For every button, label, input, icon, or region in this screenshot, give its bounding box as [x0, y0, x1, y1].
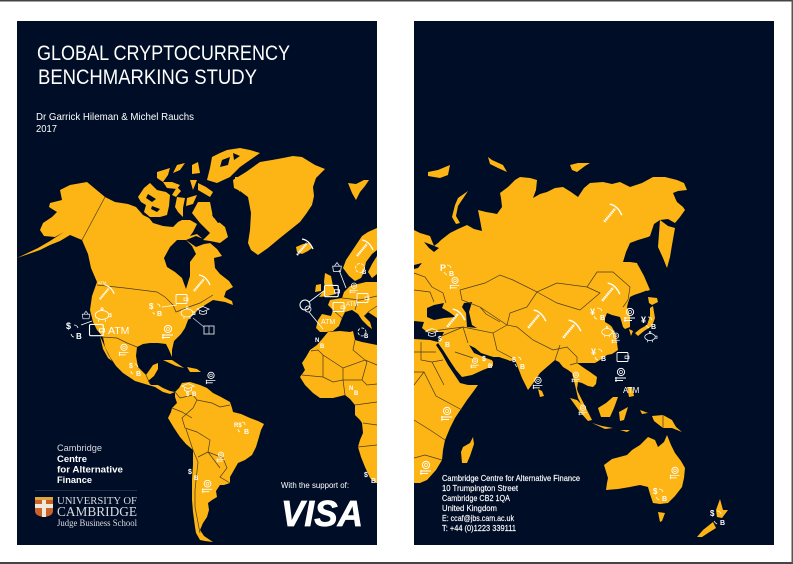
title: GLOBAL CRYPTOCURRENCY	[37, 42, 290, 65]
icon: exchange dollar to bitcoin Chicago	[149, 302, 177, 318]
icon: piggy bank China	[602, 326, 614, 337]
Kamchatka	[658, 220, 675, 268]
icon: hand coin Korea	[624, 308, 635, 322]
label: ATM California: ATM	[108, 325, 129, 337]
icon: exchange Australia: B	[662, 496, 667, 503]
Country borders	[414, 272, 663, 460]
University of Cambridge Judge Business School logo: Judge Business School	[57, 518, 137, 528]
icon: exchange Russia: P	[440, 263, 446, 273]
icon: exchange Hong Kong: B	[601, 356, 606, 363]
icon: exchange Japan: B	[651, 324, 656, 331]
contact address: 10 Trumpington Street	[442, 483, 519, 493]
icon: exchange Hong Kong: ¥	[591, 347, 596, 357]
label: ATM Alps: ATM	[346, 302, 358, 308]
Cambridge Centre for Alternative Finance logo: for Alternative	[57, 464, 123, 474]
authors and year: Dr Garrick Hileman & Michel Rauchs	[36, 112, 194, 123]
Greenland	[233, 156, 325, 255]
icon: hand coin Caribbean	[206, 372, 215, 384]
contact address: United Kingdom	[442, 503, 497, 513]
icon: exchange dollar to bitcoin west: $	[66, 321, 71, 331]
Svalbard	[348, 180, 369, 200]
Scandinavia	[343, 228, 377, 281]
Country borders	[82, 197, 377, 533]
icon: exchange Brazil: R$	[234, 423, 242, 429]
icon: exchange New Zealand: B	[720, 520, 725, 527]
icon: exchange Brazil	[234, 422, 249, 436]
icon: exchange South Africa: B	[371, 478, 376, 485]
icon: hand coin Vietnam	[572, 372, 580, 382]
Cambridge Centre for Alternative Finance logo: Finance	[57, 475, 92, 485]
icon: pickaxe Siberia	[604, 204, 622, 222]
icon: exchange New Zealand: $	[710, 509, 715, 518]
South America	[168, 382, 264, 542]
panel: front cover	[17, 21, 377, 545]
label: ATM Spain: ATM	[321, 319, 335, 326]
authors and year	[36, 112, 194, 135]
icon: exchange China north: ¥	[590, 307, 595, 317]
icon: exchange dollar to bitcoin west	[66, 321, 92, 341]
icon: hand coin Russia	[450, 277, 459, 289]
icon: hand coin Shanghai	[612, 333, 620, 343]
Cuba and Hispaniola	[163, 360, 201, 372]
icon: hand coin UAE	[470, 358, 479, 368]
icon: network globe Atlantic	[300, 270, 346, 329]
icon: hand coin Argentina	[202, 480, 212, 493]
Sri Lanka	[538, 389, 544, 397]
icon: exchange UAE: $	[482, 356, 486, 363]
icon: hand coin Southern US	[162, 325, 173, 339]
icon: wallet Germany	[357, 294, 369, 302]
icon: exchange Mexico	[129, 363, 141, 378]
support text: With the support of:	[281, 481, 349, 490]
icon: exchange dollar to bitcoin west: B	[76, 332, 82, 341]
icon: basket California	[82, 311, 90, 319]
Arctic islands	[138, 148, 260, 243]
icon: exchange Pakistan: $	[512, 357, 516, 364]
contact address: Cambridge CB2 1QA	[442, 493, 510, 503]
Madagascar	[461, 437, 474, 463]
icon: book Atlantic	[193, 318, 214, 334]
icon: exchange Pakistan: B	[520, 364, 525, 371]
icon: piggy bank California	[95, 308, 111, 322]
icon: hand coin Philippines	[615, 368, 626, 382]
New Guinea	[652, 415, 682, 432]
icon: pickaxe Inner Mongolia	[602, 283, 620, 301]
icon: exchange Venezuela: $	[186, 392, 190, 398]
icon: exchange UAE: B	[488, 364, 493, 370]
icon: exchange Australia	[653, 487, 667, 503]
icon: exchange Israel	[438, 336, 450, 349]
Mediterranean Sea	[414, 321, 444, 342]
icon: exchange Nigeria: N	[349, 386, 353, 392]
Hudson Bay	[164, 240, 196, 289]
icon: hand coin Australia	[670, 467, 679, 479]
label: ATM Philippines: ATM	[623, 386, 640, 395]
Arctic channels	[146, 153, 240, 223]
icon: exchange Brazil: B	[244, 429, 249, 436]
icon: graduation cap Venezuela	[182, 384, 194, 391]
icon: exchange Hong Kong	[591, 347, 606, 363]
icon: basket Atlantic	[333, 263, 341, 271]
icon: exchange Chile: B	[194, 476, 199, 482]
map icons: North America	[66, 239, 313, 493]
icon: hand coin Netherlands	[350, 283, 358, 293]
world map: Americas and western Europe/Africa	[17, 148, 377, 542]
icon: exchange Japan: ¥	[641, 315, 646, 325]
icon: university crest	[35, 497, 53, 517]
Baja California	[100, 336, 112, 361]
University of Cambridge Judge Business School logo: CAMBRIDGE	[57, 504, 137, 519]
icon: graduation cap Boston	[197, 306, 209, 314]
icon: pickaxe Sweden	[357, 240, 373, 256]
icon: exchange Morocco: B	[320, 344, 325, 350]
icon: graduation cap Eastern Mediterranean	[426, 328, 438, 336]
Baltic Sea	[414, 263, 422, 269]
icon: wallet UK	[324, 285, 340, 297]
icon: wallet Taiwan	[617, 352, 629, 362]
icon: hand coin Kenya	[441, 407, 452, 421]
icon: exchange dollar to bitcoin Chicago: B	[157, 311, 162, 318]
contact address: E: ccaf@jbs.cam.ac.uk	[442, 513, 515, 523]
icon: exchange Mexico: $	[129, 363, 133, 370]
Iceland	[296, 243, 312, 254]
icon: exchange Venezuela	[186, 392, 197, 398]
University of Cambridge Judge Business School logo: UNIVERSITY OF	[57, 496, 137, 507]
icon: exchange Russia: B	[449, 271, 454, 278]
icon: hand coin South Africa	[420, 461, 431, 475]
British Isles	[315, 273, 336, 297]
Australia	[604, 435, 685, 504]
icon: exchange Mexico: B	[136, 371, 141, 378]
North America	[17, 182, 233, 394]
Arctic islands of Russia	[428, 157, 590, 224]
authors and year: 2017	[36, 124, 57, 135]
University of Cambridge Judge Business School logo	[35, 496, 137, 528]
icon: piggy bank New York	[181, 306, 195, 319]
Black Sea	[427, 303, 456, 320]
icon: pickaxe Sichuan	[563, 320, 581, 338]
icon: pickaxe Iceland	[297, 239, 313, 255]
icon: pickaxe western US	[100, 285, 114, 299]
icon: exchange Sweden: B	[362, 270, 367, 276]
icon: exchange South Africa: $	[364, 472, 368, 479]
Hudson Strait	[186, 236, 211, 247]
world map: Eurasia, Africa and Oceania	[414, 157, 728, 537]
Cambridge Centre for Alternative Finance logo	[35, 443, 137, 491]
icon: hand coin Sumatra	[578, 405, 587, 415]
Tasmania	[658, 512, 665, 522]
icon: hand coin India	[533, 377, 542, 389]
icon: hand coin Mexico	[119, 344, 128, 356]
icon: exchange Chile: $	[188, 469, 192, 476]
Japan	[629, 265, 658, 336]
VISA logo: VISA	[281, 493, 363, 534]
icon: exchange New Zealand	[710, 509, 725, 527]
Cambridge Centre for Alternative Finance logo: Centre	[57, 454, 87, 464]
icon: wallet California	[90, 324, 104, 336]
icon: exchange UAE	[482, 356, 493, 370]
icon: exchange dollar to bitcoin Chicago: $	[149, 302, 154, 311]
Africa (west)	[300, 331, 377, 483]
contact address: T: +44 (0)1223 339111	[442, 523, 516, 533]
label: ATM Vancouver: ATM	[98, 280, 106, 285]
panel: back cover	[414, 21, 774, 545]
icon: exchange China north	[590, 307, 605, 322]
Persian Gulf	[469, 345, 497, 362]
Continental Europe	[316, 282, 377, 332]
map icons: Europe and Africa	[300, 240, 376, 485]
icon: exchange Venezuela: B	[192, 392, 197, 398]
icon: exchange Nigeria: B	[354, 391, 359, 397]
contact address	[442, 473, 580, 533]
icon: wallet Great Lakes	[176, 294, 188, 304]
Caspian Sea	[462, 302, 477, 328]
White Sea	[424, 242, 439, 252]
icon: exchange Sweden	[356, 264, 367, 276]
icon: pickaxe Georgia	[447, 309, 465, 327]
New Zealand	[697, 499, 728, 537]
icon: exchange Italy: B	[364, 334, 369, 340]
icon: hand coin Paraguay	[216, 452, 225, 462]
icon: exchange Italy	[358, 328, 369, 340]
icon: pickaxe Canada	[194, 275, 210, 291]
icon: exchange Morocco: N	[315, 338, 319, 344]
icon: piggy bank Japan	[645, 331, 657, 342]
icon: exchange Nigeria	[349, 386, 359, 397]
title	[37, 42, 290, 89]
Indonesia and Philippines	[570, 387, 648, 432]
icon: exchange Morocco	[315, 338, 325, 350]
icon: pickaxe Western China	[528, 310, 546, 328]
icon: exchange China north: B	[600, 315, 605, 322]
icon: exchange Israel: B	[445, 342, 450, 349]
icon: exchange Israel: $	[438, 336, 442, 343]
icon: exchange Chile	[188, 469, 199, 482]
icon: exchange Russia	[440, 263, 454, 278]
icon: exchange South Africa	[364, 472, 376, 485]
icon: exchange Pakistan	[512, 357, 525, 371]
Eurasia and eastern Africa	[414, 177, 687, 483]
contact address: Cambridge Centre for Alternative Finance	[442, 473, 580, 483]
icon: exchange Australia: $	[653, 487, 658, 496]
icon: exchange Japan	[641, 315, 656, 331]
map icons: Asia	[420, 204, 725, 527]
title: BENCHMARKING STUDY	[38, 66, 257, 89]
Cambridge Centre for Alternative Finance logo: Cambridge	[57, 443, 102, 453]
icon: wallet France	[333, 302, 345, 312]
